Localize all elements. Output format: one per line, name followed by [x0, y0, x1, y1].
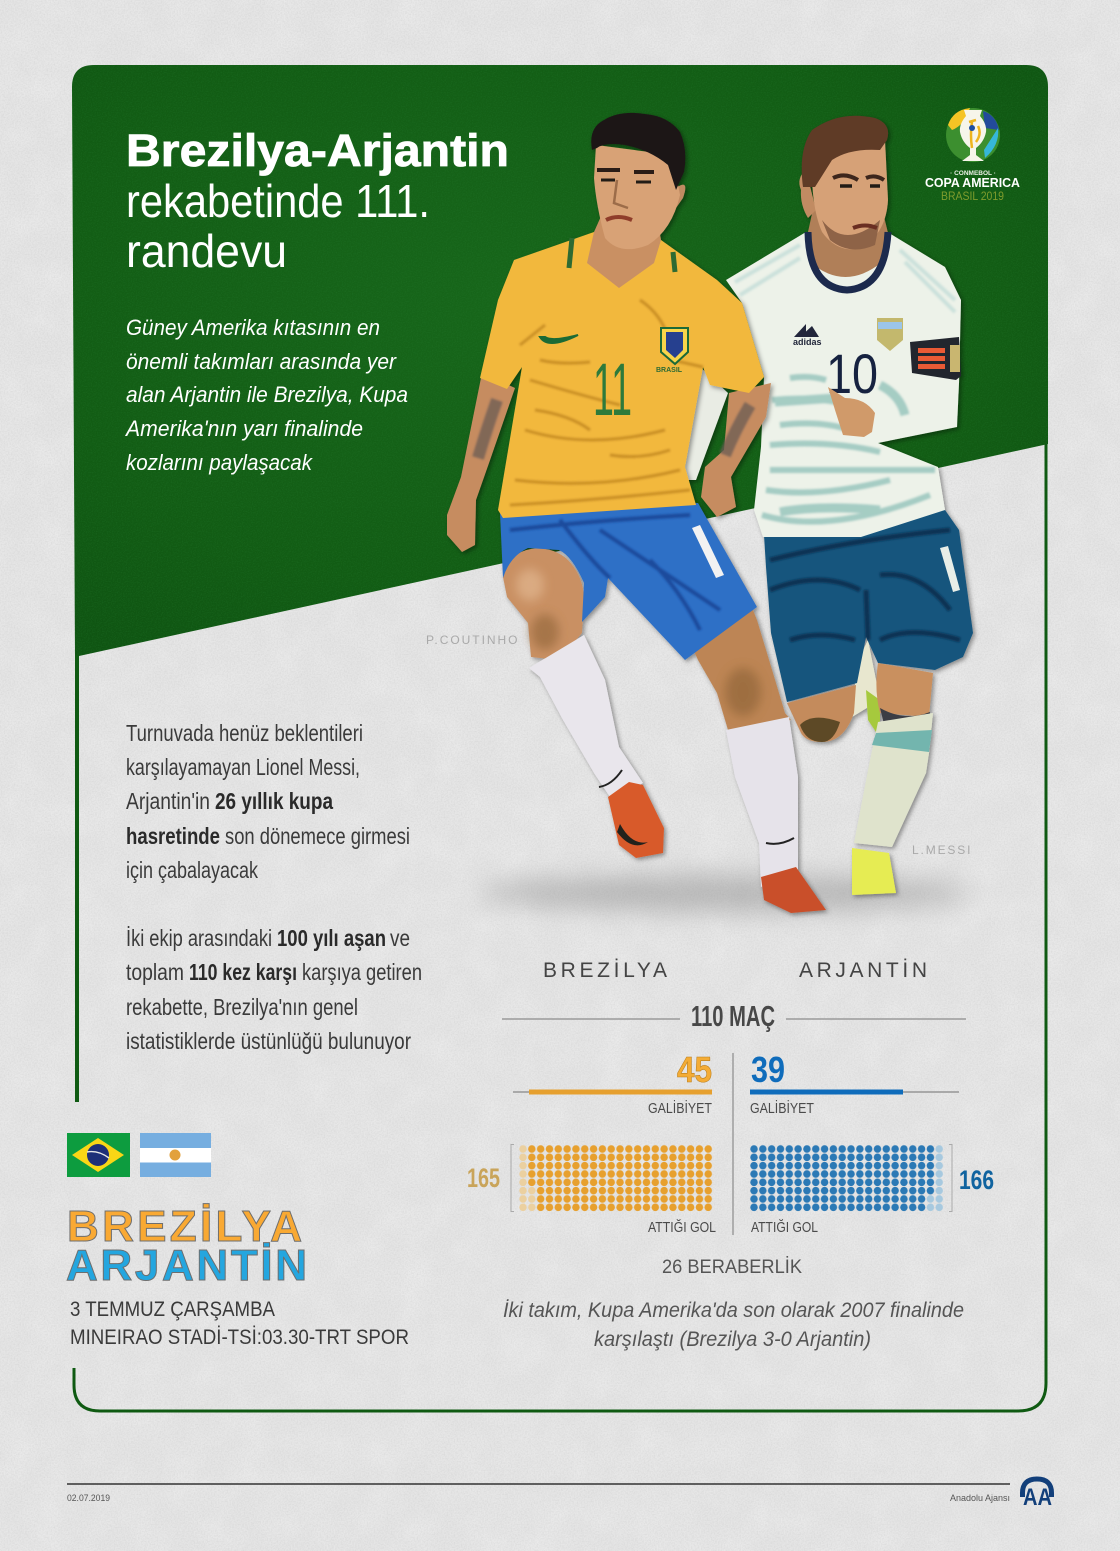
flag: Brazil	[67, 1133, 130, 1177]
goals dot chart: Argentina	[750, 1144, 994, 1236]
Copa America logo: COPA AMERICA	[925, 176, 1020, 190]
goals dot chart: Argentina: 166	[959, 1165, 994, 1195]
draws: 26 BERABERLİK	[662, 1257, 802, 1278]
Messi neck and collar	[808, 200, 888, 290]
Messi boot	[852, 848, 896, 895]
Messi front leg	[876, 663, 933, 726]
centre divider	[732, 1053, 734, 1235]
Coutinho neck	[587, 205, 661, 288]
Messi far sleeve	[677, 363, 728, 480]
trophy	[960, 110, 986, 161]
Messi sock	[854, 713, 933, 847]
intro text	[124, 315, 408, 475]
goals dot chart: Argentina: ATTIĞI GOL	[751, 1219, 818, 1236]
intro text: önemli takımları arasında yer	[126, 349, 398, 374]
Messi jersey	[726, 232, 961, 537]
body text: rekabette, Brezilya'nın genel	[126, 994, 358, 1020]
footer	[67, 1484, 1010, 1504]
closing note: karşılaştı (Brezilya 3-0 Arjantin)	[594, 1328, 871, 1351]
body text: son dönemece girmesi	[225, 823, 410, 849]
body text: karşıya getiren	[302, 959, 422, 985]
Coutinho swoosh	[540, 335, 578, 343]
goals dot chart: Brazil	[467, 1144, 716, 1236]
Messi head	[799, 116, 888, 249]
body text: hasretinde	[126, 823, 220, 849]
wins: Argentina	[750, 1049, 959, 1117]
player labels: L.MESSI	[912, 843, 972, 857]
body text: için çabalayacak	[126, 857, 258, 883]
body text: istatistiklerde üstünlüğü bulunuyor	[126, 1028, 411, 1054]
title: Brezilya-Arjantin	[126, 125, 509, 176]
green header panel	[70, 60, 1055, 660]
title	[126, 125, 509, 277]
Messi adidas and crest: adidas	[793, 337, 822, 347]
body text: Turnuvada henüz beklentileri	[126, 720, 363, 746]
body text: 26 yıllık kupa	[215, 788, 333, 814]
total matches heading: 110 MAÇ	[691, 1001, 775, 1033]
wins: Argentina: GALİBİYET	[750, 1099, 814, 1117]
Coutinho crest: BRASIL	[656, 367, 683, 374]
closing note: İki takım, Kupa Amerika'da son olarak 2007 finalinde	[503, 1299, 964, 1322]
Coutinho shorts	[500, 503, 757, 660]
body text: ve	[390, 925, 410, 951]
goals dot chart: Brazil: ATTIĞI GOL	[648, 1219, 716, 1236]
panel frame	[74, 444, 1046, 1411]
intro text: alan Arjantin ile Brezilya, Kupa	[126, 382, 408, 407]
wins: Brazil: GALİBİYET	[648, 1099, 712, 1117]
match details	[70, 1298, 409, 1349]
footer: Anadolu Ajansı	[950, 1493, 1010, 1504]
Coutinho right leg	[682, 596, 791, 730]
Coutinho left sock	[529, 635, 643, 800]
Messi hand	[828, 387, 875, 437]
player labels: P.COUTINHO	[426, 633, 519, 647]
Coutinho number 11: 11	[593, 348, 632, 431]
intro text: kozlarını paylaşacak	[126, 450, 313, 475]
Copa America logo	[925, 108, 1020, 203]
match details: 3 TEMMUZ ÇARŞAMBA	[70, 1298, 275, 1321]
intro text: Güney Amerika kıtasının en	[126, 315, 380, 340]
goals dot chart: Brazil: 165	[467, 1163, 500, 1193]
wins: Argentina: 39	[751, 1049, 785, 1090]
Coutinho right boot	[761, 867, 826, 913]
intro text: Amerika'nın yarı finalinde	[124, 416, 363, 441]
match details: MINEIRAO STADİ-TSİ:03.30-TRT SPOR	[70, 1326, 409, 1349]
player: L. Messi	[677, 116, 973, 895]
body text: 100 yılı aşan	[277, 925, 386, 951]
wins: Brazil	[513, 1049, 712, 1117]
Messi adidas and crest	[793, 318, 903, 351]
Anadolu Agency logo: AA	[1023, 1484, 1052, 1511]
body text: 110 kez karşı	[189, 959, 297, 985]
footer: 02.07.2019	[67, 1493, 110, 1503]
Messi sock band	[872, 730, 932, 752]
body text: Arjantin'in	[126, 788, 210, 814]
Coutinho arms	[447, 373, 771, 552]
player labels	[426, 633, 972, 857]
body text	[126, 720, 422, 1054]
title: randevu	[126, 225, 287, 277]
title: rekabetinde 111.	[126, 175, 430, 227]
Coutinho left leg	[503, 548, 584, 660]
match heading: BREZİLYA	[67, 1202, 302, 1251]
flag: Argentina	[140, 1133, 211, 1177]
body text: karşılayamayan Lionel Messi,	[126, 754, 360, 780]
body text: toplam	[126, 959, 184, 985]
Coutinho crest	[656, 328, 688, 374]
player: P. Coutinho	[447, 113, 826, 913]
team names: BREZİLYA	[543, 959, 667, 982]
body text: İki ekip arasındaki	[126, 925, 272, 951]
ground shadow	[480, 875, 970, 911]
team names: ARJANTİN	[799, 959, 927, 982]
Copa America logo: · CONMEBOL ·	[950, 170, 996, 177]
match heading	[66, 1202, 307, 1290]
Coutinho jersey	[480, 232, 764, 518]
Messi number 10: 10	[826, 342, 878, 405]
Messi captain armband	[910, 337, 961, 380]
team names	[543, 959, 927, 982]
Coutinho right sock	[726, 717, 798, 887]
Messi back leg	[787, 640, 880, 742]
wins: Brazil: 45	[677, 1049, 712, 1090]
Coutinho collar	[569, 238, 675, 272]
Coutinho left boot	[608, 782, 664, 858]
Messi shorts	[764, 510, 973, 702]
match heading: ARJANTİN	[66, 1241, 307, 1290]
Coutinho head	[591, 113, 685, 249]
Copa America logo: BRASIL 2019	[941, 191, 1004, 203]
closing note	[503, 1299, 964, 1351]
